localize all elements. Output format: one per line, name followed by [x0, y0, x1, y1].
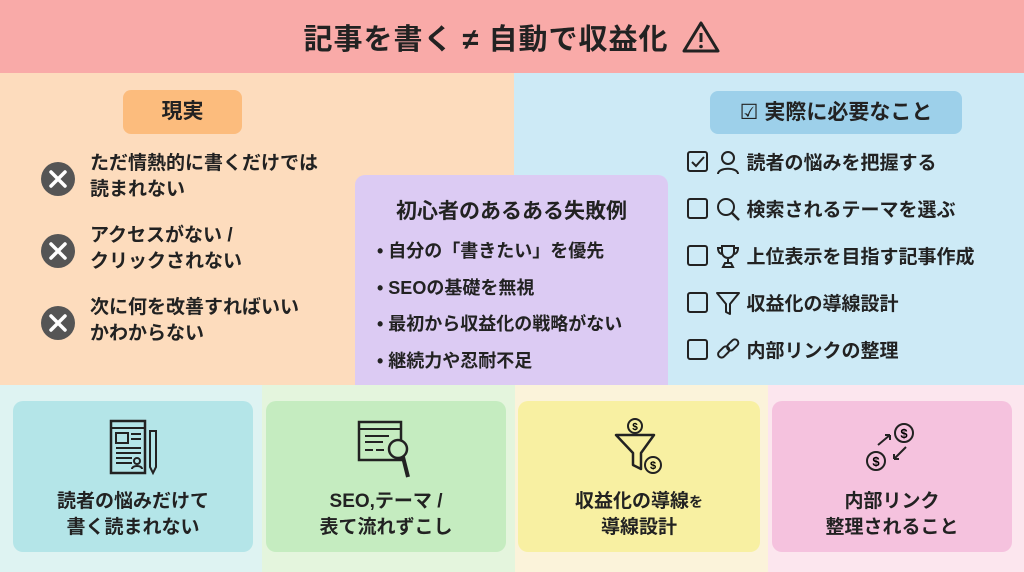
card 4: internal links — [772, 401, 1012, 552]
icon: article — [110, 420, 157, 476]
item: search: 検索されるテーマを選ぶ — [747, 200, 956, 221]
item: link — [687, 338, 899, 362]
card 2: SEO — [266, 401, 506, 552]
item: reader: 読者の悩みを把握する — [747, 153, 937, 174]
heading: 現実 — [123, 90, 242, 134]
text — [825, 490, 958, 538]
icon: coin exchange — [866, 423, 914, 471]
card 1: reader — [13, 401, 253, 552]
item 2 — [41, 224, 242, 272]
heading: 現実: 現実 — [162, 100, 204, 123]
item 2: クリックされない — [90, 251, 242, 272]
item: reader — [687, 151, 937, 174]
title band: 記事を書く ≠ 自動で収益化 — [303, 24, 669, 56]
card 3: monetization — [518, 401, 760, 552]
text — [575, 490, 703, 538]
bullet list: • 自分の「書きたい」を優先 — [377, 241, 604, 261]
item: link: 内部リンクの整理 — [747, 341, 899, 362]
icon: browser with magnifier — [358, 420, 410, 478]
title band — [0, 0, 1024, 73]
text: 収益化の導線を — [575, 491, 703, 512]
bullet list: • SEOの基礎を無視 — [377, 278, 534, 298]
icon: funnel with coins — [614, 418, 662, 474]
item 3 — [41, 296, 299, 344]
heading: 初心者のあるある失敗例 — [396, 200, 627, 223]
text: 表て流れずこし — [319, 517, 452, 538]
heading: 実際に必要なこと: ☑ 実際に必要なこと — [740, 101, 932, 124]
text — [57, 490, 209, 538]
item: funnel: 収益化の導線設計 — [747, 294, 899, 315]
text: 整理されること — [825, 517, 958, 538]
bullet list: • 最初から収益化の戦略がない — [377, 314, 622, 334]
text: 読者の悩みだけて — [57, 491, 209, 512]
icon: funnel with coins: $ — [650, 460, 656, 472]
item 2: アクセスがない / — [90, 225, 233, 246]
bottom backgrounds — [0, 385, 262, 572]
text — [319, 491, 452, 538]
item 1: ただ情熱的に書くだけでは — [90, 153, 318, 174]
panel: what is needed — [514, 73, 1024, 385]
text: SEO,テーマ / — [330, 491, 442, 512]
icon: funnel with coins: $ — [632, 422, 638, 433]
text: 内部リンク — [844, 491, 940, 512]
panel: reality — [0, 73, 514, 385]
text: 導線設計 — [601, 517, 677, 538]
icon: coin exchange: $ — [900, 426, 908, 441]
heading: 実際に必要なこと — [710, 91, 962, 134]
panel: beginner mistakes — [355, 175, 668, 385]
item 3: かわからない — [90, 323, 204, 344]
item 1: 読まれない — [90, 179, 185, 200]
item: trophy: 上位表示を目指す記事作成 — [747, 247, 975, 268]
checklist — [687, 151, 975, 362]
item 1 — [41, 152, 318, 200]
item: funnel — [687, 292, 899, 315]
bullet list — [377, 241, 622, 370]
text: 書く読まれない — [66, 517, 200, 538]
bullet list: • 継続力や忍耐不足 — [377, 350, 532, 370]
icon: coin exchange: $ — [872, 454, 880, 469]
item 3: 次に何を改善すればいい — [90, 297, 299, 318]
